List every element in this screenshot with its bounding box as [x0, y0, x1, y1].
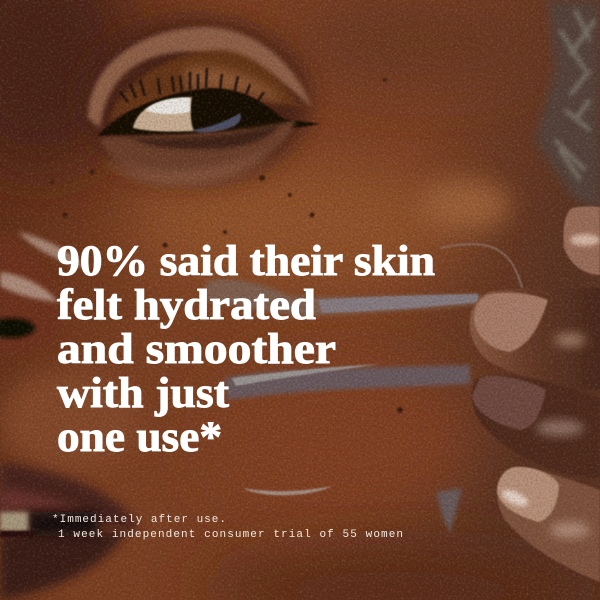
headline: and smoother	[57, 326, 336, 373]
headline: 90% said their skin	[57, 238, 435, 285]
headline: felt hydrated	[57, 282, 316, 329]
icon: gel streaks on skin	[206, 244, 522, 534]
footnote: 1 week independent consumer trial of 55 women	[58, 529, 403, 541]
icon: eye	[80, 18, 320, 184]
icon: grey beard at upper right	[535, 0, 600, 212]
icon: nose	[0, 232, 85, 354]
icon: skin spots on cheek	[50, 78, 403, 413]
icon: fingers	[470, 206, 600, 582]
headline: with just	[57, 370, 230, 417]
icon: lips	[0, 462, 140, 600]
footnote	[52, 514, 403, 541]
headline: one use*	[57, 414, 222, 461]
footnote: *Immediately after use.	[52, 514, 226, 526]
headline	[57, 238, 435, 461]
